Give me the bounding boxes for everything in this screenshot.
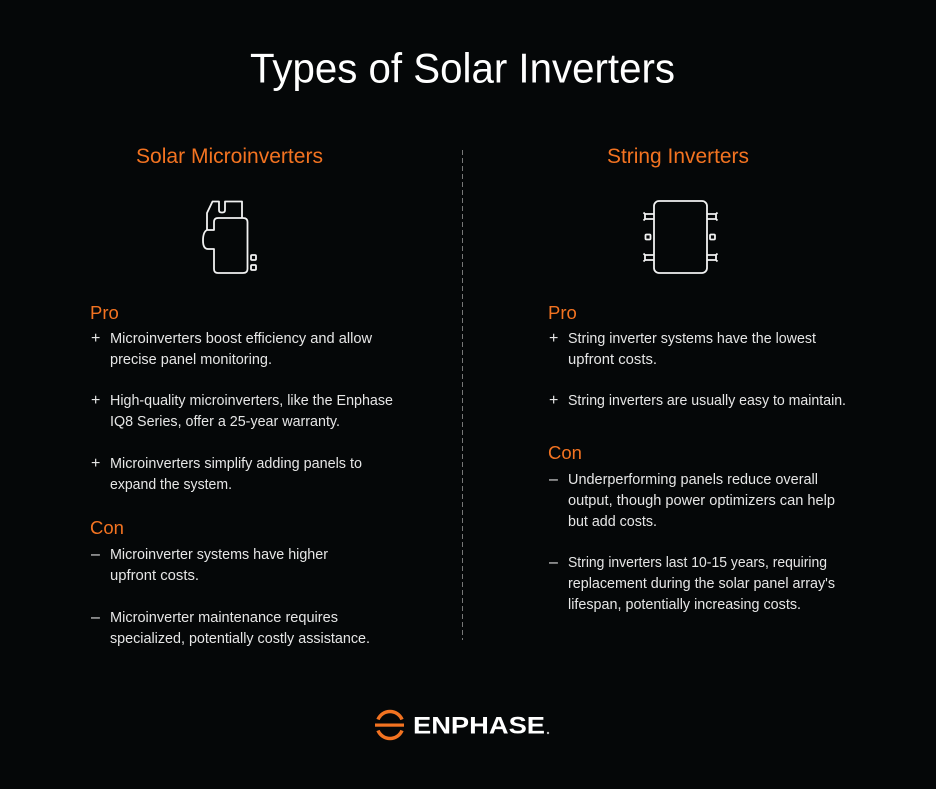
list: string pros: String inverters are usually easy to maintain. [568,393,846,409]
list: microinverter pros: + [91,330,100,347]
list: microinverter pros: + [91,392,100,409]
logo: enphase [375,712,549,740]
list: string cons: replacement during the solar panel array's [568,576,835,592]
panel: string inverters [548,145,846,613]
list: microinverter cons: – [91,609,100,626]
list: microinverter pros: + [91,455,100,472]
panel: solar microinverters [90,145,393,647]
subheading: microinverter pro: Pro [90,302,119,323]
list: string pros: upfront costs. [568,352,657,368]
heading: solar microinverters: Solar Microinverters [136,145,323,168]
list: microinverter cons: – [91,546,100,563]
list: microinverter cons: specialized, potentially costly assistance. [110,631,370,647]
list: microinverter pros [91,330,393,493]
list: microinverter cons [91,546,370,647]
subheading: string pro: Pro [548,302,577,323]
list: string pros [549,330,846,409]
subheading: microinverter con: Con [90,517,124,538]
list: string cons: output, though power optimizers can help [568,493,835,509]
heading: string inverters: String Inverters [607,145,749,168]
list: string pros: + [549,330,558,347]
list: string cons [549,471,835,613]
list: string cons: – [549,554,558,571]
list: microinverter pros: Microinverters simplify adding panels to [110,456,362,472]
list: string cons: Underperforming panels reduce overall [568,472,818,488]
list: string pros: + [549,392,558,409]
list: string cons: but add costs. [568,514,657,530]
title: Types of Solar Inverters [250,44,675,92]
list: microinverter pros: Microinverters boost efficiency and allow [110,331,372,347]
list: string pros: String inverter systems have the lowest [568,331,816,347]
list: string cons: – [549,471,558,488]
list: microinverter cons: Microinverter systems have higher [110,547,328,563]
subheading: string con: Con [548,442,582,463]
list: microinverter pros: precise panel monitoring. [110,352,272,368]
list: string cons: lifespan, potentially increasing costs. [568,597,801,613]
list: microinverter cons: Microinverter maintenance requires [110,610,338,626]
list: microinverter cons: upfront costs. [110,568,199,584]
list: microinverter pros: expand the system. [110,477,232,493]
icon: microinverter [203,202,256,273]
icon: string inverter [644,201,718,273]
list: string cons: String inverters last 10-15 years, requiring [568,555,827,571]
list: microinverter pros: IQ8 Series, offer a 25-year warranty. [110,414,340,430]
logo: enphase: ENPHASE [413,712,545,740]
list: microinverter pros: High-quality microinverters, like the Enphase [110,393,393,409]
